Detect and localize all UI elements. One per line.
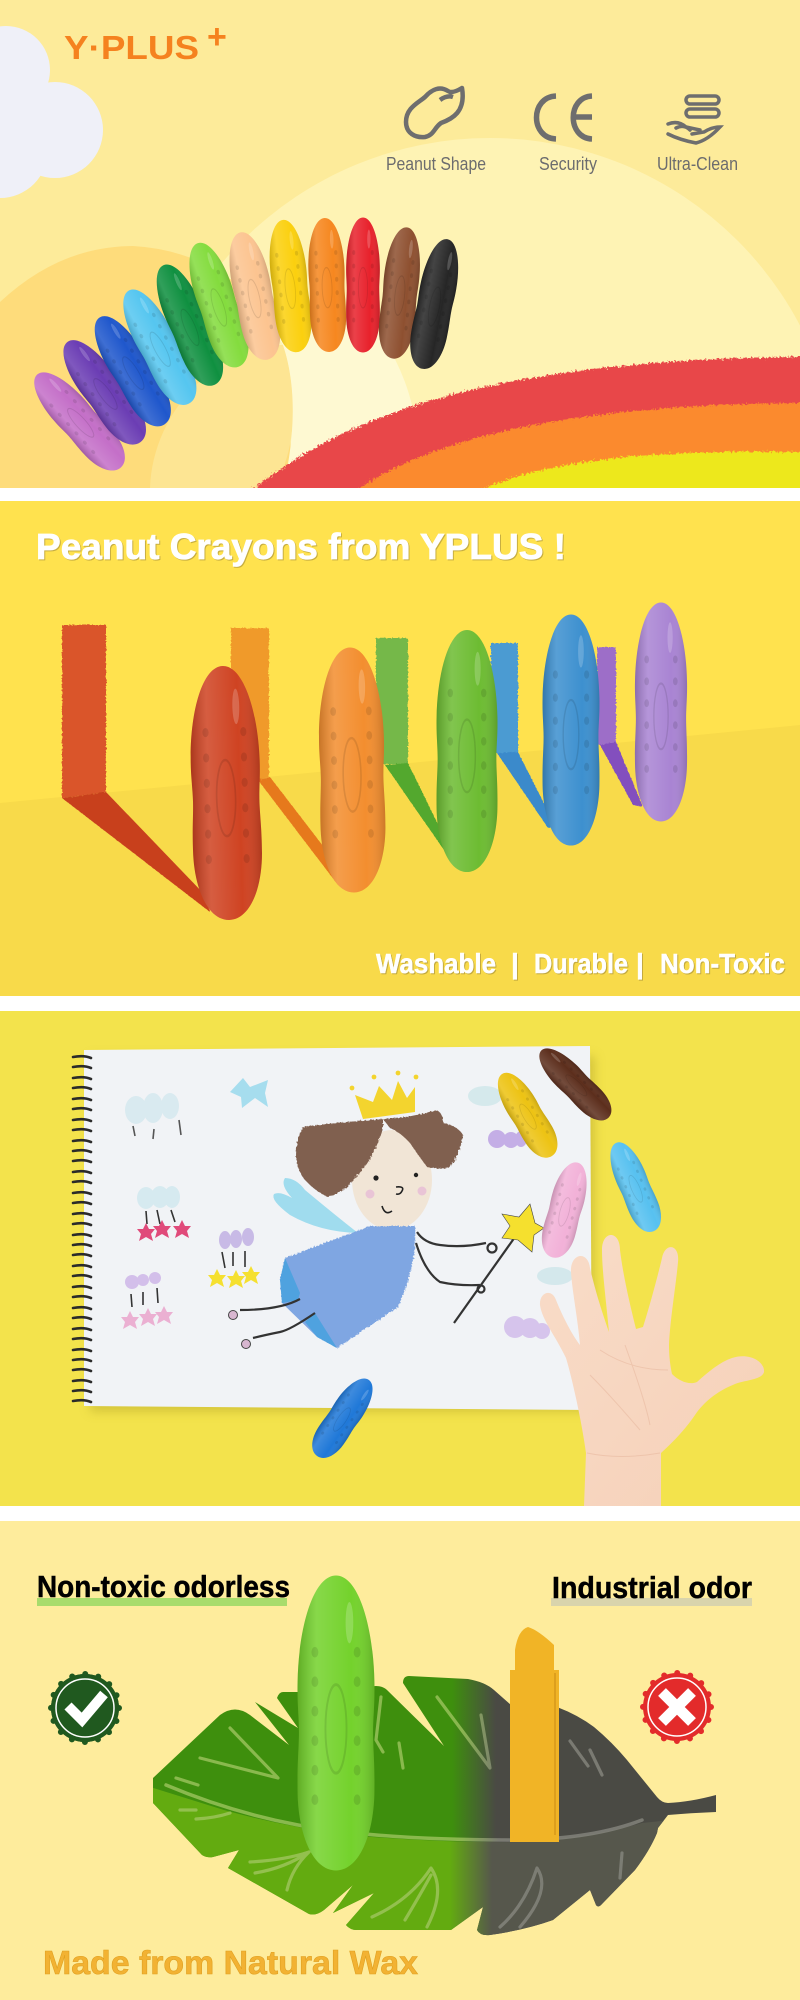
spiral binding	[73, 1056, 91, 1402]
pale sun circle	[222, 138, 800, 445]
cloud	[0, 26, 103, 198]
crayon: green	[437, 630, 497, 872]
hair	[296, 1110, 463, 1197]
drawing: doodles	[121, 1078, 573, 1339]
leaf	[150, 1670, 720, 1940]
logo: +	[207, 18, 227, 56]
crayon: yellow stick	[510, 1627, 559, 1842]
logo: Y·PLUS	[64, 29, 199, 66]
leaf veins	[166, 1697, 642, 1927]
feature list: Durable	[534, 948, 628, 979]
crayon: brown	[531, 1040, 619, 1128]
panel: hero	[0, 0, 800, 488]
hand	[540, 1235, 764, 1506]
drawing: fairy	[228, 1071, 544, 1348]
pale yellow background	[0, 1521, 800, 2000]
icon: peanut shape	[406, 88, 463, 137]
crayon: sky blue	[602, 1137, 668, 1237]
crayon: pink	[536, 1158, 594, 1262]
wand star	[502, 1204, 544, 1252]
crayon: blue	[305, 1371, 381, 1465]
page shadow	[90, 1056, 595, 1412]
panel: natural wax comparison	[0, 1521, 800, 2000]
face	[366, 1173, 426, 1213]
feature list: Non-Toxic	[660, 948, 785, 979]
head	[352, 1130, 432, 1230]
shadow: red	[62, 625, 210, 912]
feet	[228, 1310, 250, 1348]
label: Security: Security	[539, 154, 597, 174]
heading: Non-toxic odorless: Non-toxic odorless	[37, 1569, 290, 1604]
feature list: |	[511, 948, 519, 979]
feature list	[376, 948, 785, 979]
badge: check	[51, 1674, 119, 1742]
wings	[273, 1178, 358, 1233]
feature list: |	[636, 948, 644, 979]
icon: CE mark	[536, 96, 592, 139]
panel: peanut crayons from YPLUS	[0, 501, 800, 996]
wall	[0, 501, 800, 996]
shadow: orange	[231, 628, 338, 885]
crayon: green peanut	[297, 1576, 375, 1870]
crown	[350, 1071, 418, 1119]
arms, legs and wand	[240, 1232, 515, 1338]
crayon: orange	[317, 647, 387, 893]
crayon: red	[188, 665, 264, 921]
label: Ultra-Clean: Ultra-Clean	[657, 154, 738, 174]
rainbow	[252, 357, 800, 500]
crayon: purple	[635, 602, 687, 822]
row of twelve peanut crayons	[23, 217, 465, 480]
dress	[280, 1226, 415, 1348]
badge: cross	[643, 1673, 711, 1741]
panel: drawing on sketchbook	[0, 1011, 800, 1506]
crayon: yellow	[489, 1066, 565, 1164]
icon: ultra-clean hand	[668, 96, 720, 143]
light hill	[150, 345, 293, 488]
pale hill	[280, 325, 412, 464]
logo	[64, 28, 226, 60]
crayon: blue	[543, 614, 599, 846]
heading: Peanut Crayons from YPLUS !	[36, 526, 566, 567]
shadow: green	[376, 638, 457, 863]
shadow: blue	[491, 643, 556, 828]
caption: Made from Natural Wax	[43, 1944, 419, 1981]
label: Peanut Shape: Peanut Shape	[386, 154, 486, 174]
orange hill	[0, 246, 291, 488]
shadow: purple	[597, 647, 643, 807]
floor	[0, 725, 800, 996]
sketchbook page	[84, 1046, 592, 1410]
heading: Industrial odor: Industrial odor	[552, 1570, 752, 1605]
feature list: Washable	[376, 948, 496, 979]
yellow background	[0, 1011, 800, 1506]
